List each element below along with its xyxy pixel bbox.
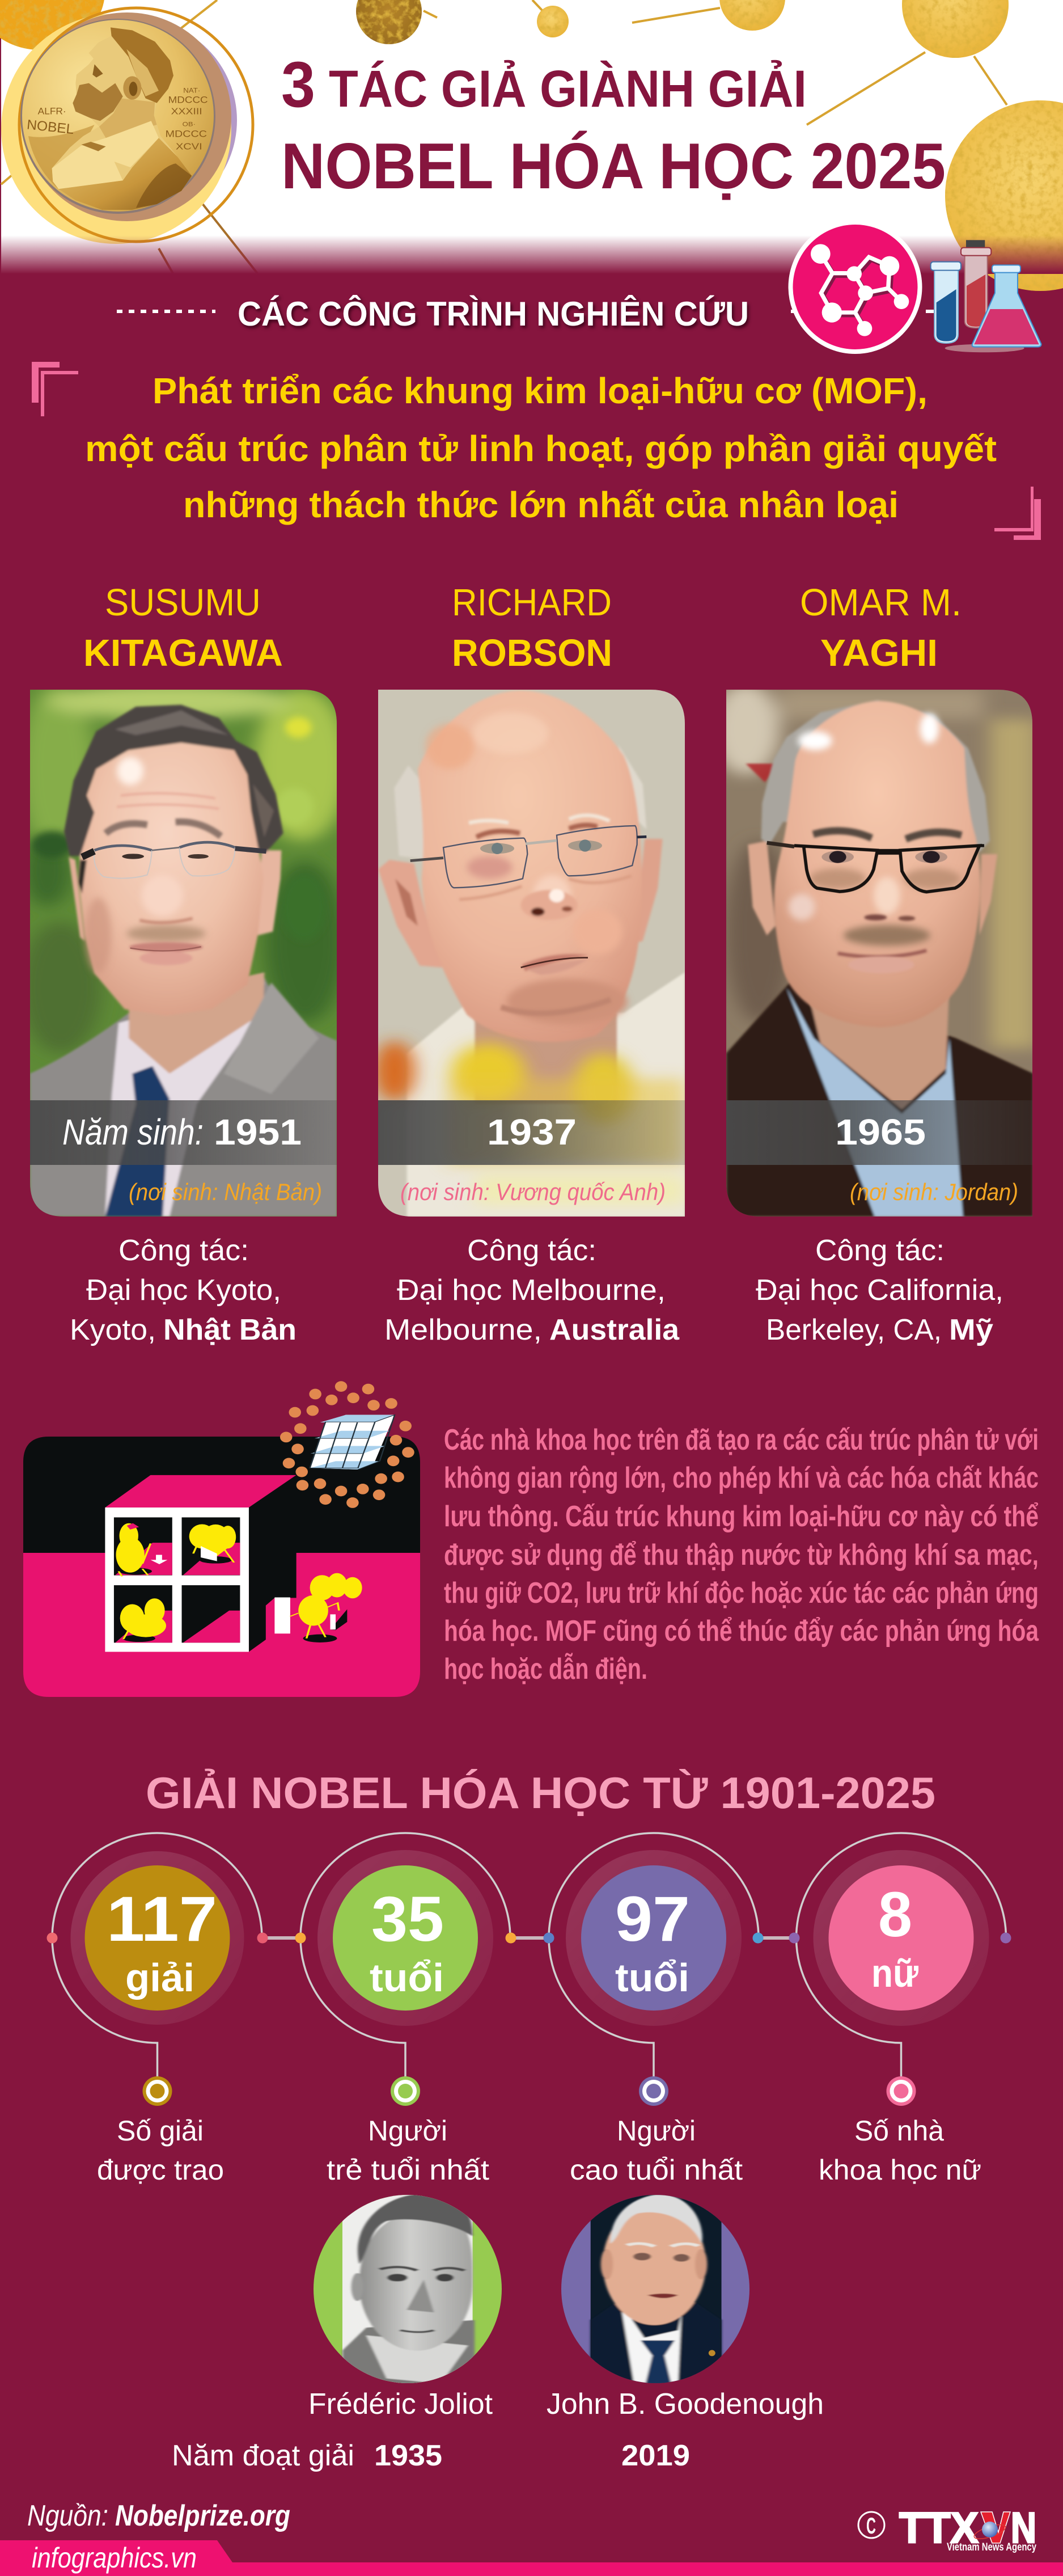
portrait: John B. Goodenough [561, 2194, 750, 2384]
birth year: 1937 [487, 1112, 577, 1152]
name: SUSUMU [105, 581, 261, 624]
birth year [62, 1112, 302, 1152]
photo [712, 683, 1037, 1217]
paragraph: MOF description [444, 1424, 1039, 1686]
affiliation: Mỹ [949, 1314, 993, 1346]
affiliation: Công tác: [467, 1234, 596, 1267]
stat: 8 women: khoa học nữ [819, 2154, 981, 2186]
name [452, 581, 612, 674]
birth year band [30, 1100, 337, 1165]
birth year: 1951 [214, 1112, 302, 1152]
logo: TTXVN: C [866, 2514, 876, 2539]
laureate: Omar M. Yaghi [712, 581, 1037, 1346]
caption: portrait names: John B. Goodenough [547, 2388, 824, 2421]
stat: youngest 35: tuổi [370, 1956, 444, 2000]
stat: youngest 35: 35 [371, 1884, 444, 1954]
birth year: Năm sinh: [62, 1112, 204, 1152]
stat: youngest 35 [295, 1833, 516, 2186]
affiliation [384, 1234, 680, 1346]
stat: 117 prizes: giải [125, 1956, 194, 2000]
icon: Nobel medal: MDCCC [166, 129, 207, 140]
stat: 117 prizes [46, 1833, 268, 2186]
name: KITAGAWA [83, 632, 283, 674]
birthplace: (nơi sinh: Jordan) [850, 1179, 1018, 1205]
stat: 8 women: Số nhà [854, 2115, 944, 2147]
subtitle [85, 370, 997, 525]
subtitle: một cấu trúc phân tử linh hoạt, góp phần giải quyết [85, 428, 997, 469]
caption: award years: 1935 [374, 2439, 442, 2472]
decorative bracket: top left [32, 362, 78, 416]
stat: oldest 97: cao tuổi nhất [570, 2154, 743, 2186]
title: 3 [281, 49, 315, 121]
source [27, 2499, 290, 2532]
affiliation: Công tác: [815, 1234, 945, 1267]
heading: research works: CÁC CÔNG TRÌNH NGHIÊN CỨU [238, 295, 749, 333]
header fade into maroon [0, 235, 1063, 274]
birth year: 1965 [835, 1112, 926, 1152]
icon: Nobel medal: MDCCC [168, 95, 208, 105]
title [281, 49, 946, 202]
stat: youngest 35: trẻ tuổi nhất [327, 2154, 489, 2186]
affiliation: Melbourne, [384, 1314, 542, 1346]
affiliation: Nhật Bản [163, 1314, 297, 1346]
affiliation: Đại học Kyoto, [86, 1274, 281, 1307]
name: ROBSON [452, 632, 612, 674]
portrait: Frédéric Joliot [314, 2194, 502, 2384]
icon: Nobel medal: XXXIII [171, 107, 202, 117]
icon: Nobel medal: XCVI [176, 142, 202, 151]
birthplace: (nơi sinh: Nhật Bản) [129, 1179, 322, 1205]
affiliation [756, 1234, 1003, 1346]
name: RICHARD [452, 581, 612, 624]
logo: TTXVN: N [1011, 2504, 1036, 2552]
caption: award years [172, 2439, 690, 2472]
stat: oldest 97: Người [617, 2115, 696, 2147]
affiliation: Đại học California, [756, 1274, 1003, 1307]
laureate: Susumu Kitagawa [20, 581, 349, 1346]
caption: award years: 2019 [621, 2439, 690, 2472]
footer bar [0, 2540, 1063, 2576]
caption: portrait names: Frédéric Joliot [308, 2388, 493, 2421]
name [800, 581, 962, 674]
dotted rule [117, 310, 957, 313]
header background with gold molecules [0, 0, 1063, 291]
subtitle: những thách thức lớn nhất của nhân loại [183, 484, 899, 525]
icon: Nobel medal: NAT· [183, 86, 200, 94]
icon: Nobel medal: ALFR· [38, 106, 66, 117]
caption: portrait names [308, 2388, 824, 2421]
icon: Nobel medal: NOBEL [26, 117, 75, 137]
name [83, 581, 283, 674]
icon: Nobel medal [1, 8, 253, 244]
heading: Nobel chemistry 1901-2025: GIẢI NOBEL HÓA HỌC TỪ 1901-2025 [146, 1768, 935, 1818]
stat: 8 women: 8 [878, 1879, 912, 1950]
stat: 117 prizes: được trao [97, 2154, 224, 2186]
birthplace: (nơi sinh: Vương quốc Anh) [400, 1179, 666, 1205]
stat: oldest 97: 97 [615, 1884, 690, 1954]
icon: Nobel medal: OB· [183, 121, 196, 128]
icon: molecule badge [790, 222, 920, 352]
title: NOBEL HÓA HỌC 2025 [281, 130, 946, 202]
orange atoms [280, 1381, 414, 1508]
source: Nobelprize.org [115, 2499, 290, 2532]
affiliation [70, 1234, 297, 1346]
birth year band [378, 1100, 685, 1165]
photo [374, 690, 685, 1217]
stat: 8 women [789, 1833, 1011, 2186]
stat: oldest 97: tuổi [615, 1956, 689, 2000]
affiliation: Công tác: [118, 1234, 249, 1267]
footer site name: infographics.vn [32, 2542, 197, 2574]
laureate: Richard Robson [374, 581, 685, 1346]
logo: TTXVN: Vietnam News Agency [947, 2541, 1036, 2553]
affiliation: Kyoto, [70, 1314, 156, 1346]
paragraph: MOF description: học hoặc dẫn điện. [444, 1653, 647, 1686]
name: YAGHI [820, 632, 938, 674]
title: TÁC GIẢ GIÀNH GIẢI [329, 60, 807, 118]
photo [20, 683, 349, 1217]
stat: youngest 35: Người [368, 2115, 447, 2147]
stat: 117 prizes: 117 [107, 1884, 217, 1954]
stat: oldest 97 [543, 1833, 763, 2186]
logo: TTXVN: TTX [899, 2504, 979, 2552]
name: OMAR M. [800, 581, 962, 624]
decorative bracket: bottom right [994, 487, 1041, 540]
illustration: MOF building with characters [23, 1381, 420, 1697]
birth year band [726, 1100, 1032, 1165]
subtitle: Phát triển các khung kim loại-hữu cơ (MOF), [153, 370, 928, 411]
logo: TTXVN [858, 2504, 1036, 2553]
icon: lattice cube [310, 1415, 395, 1469]
connectors between rings [262, 1936, 794, 1940]
source: Nguồn: [27, 2499, 108, 2532]
affiliation: Đại học Melbourne, [397, 1274, 666, 1307]
caption: award years: Năm đoạt giải [172, 2439, 354, 2472]
stat: 8 women: nữ [871, 1951, 918, 1995]
affiliation: Berkeley, CA, [766, 1314, 942, 1346]
stat: 117 prizes: Số giải [117, 2115, 204, 2147]
icon: test tubes and flask [931, 240, 1041, 352]
affiliation: Australia [549, 1314, 680, 1346]
